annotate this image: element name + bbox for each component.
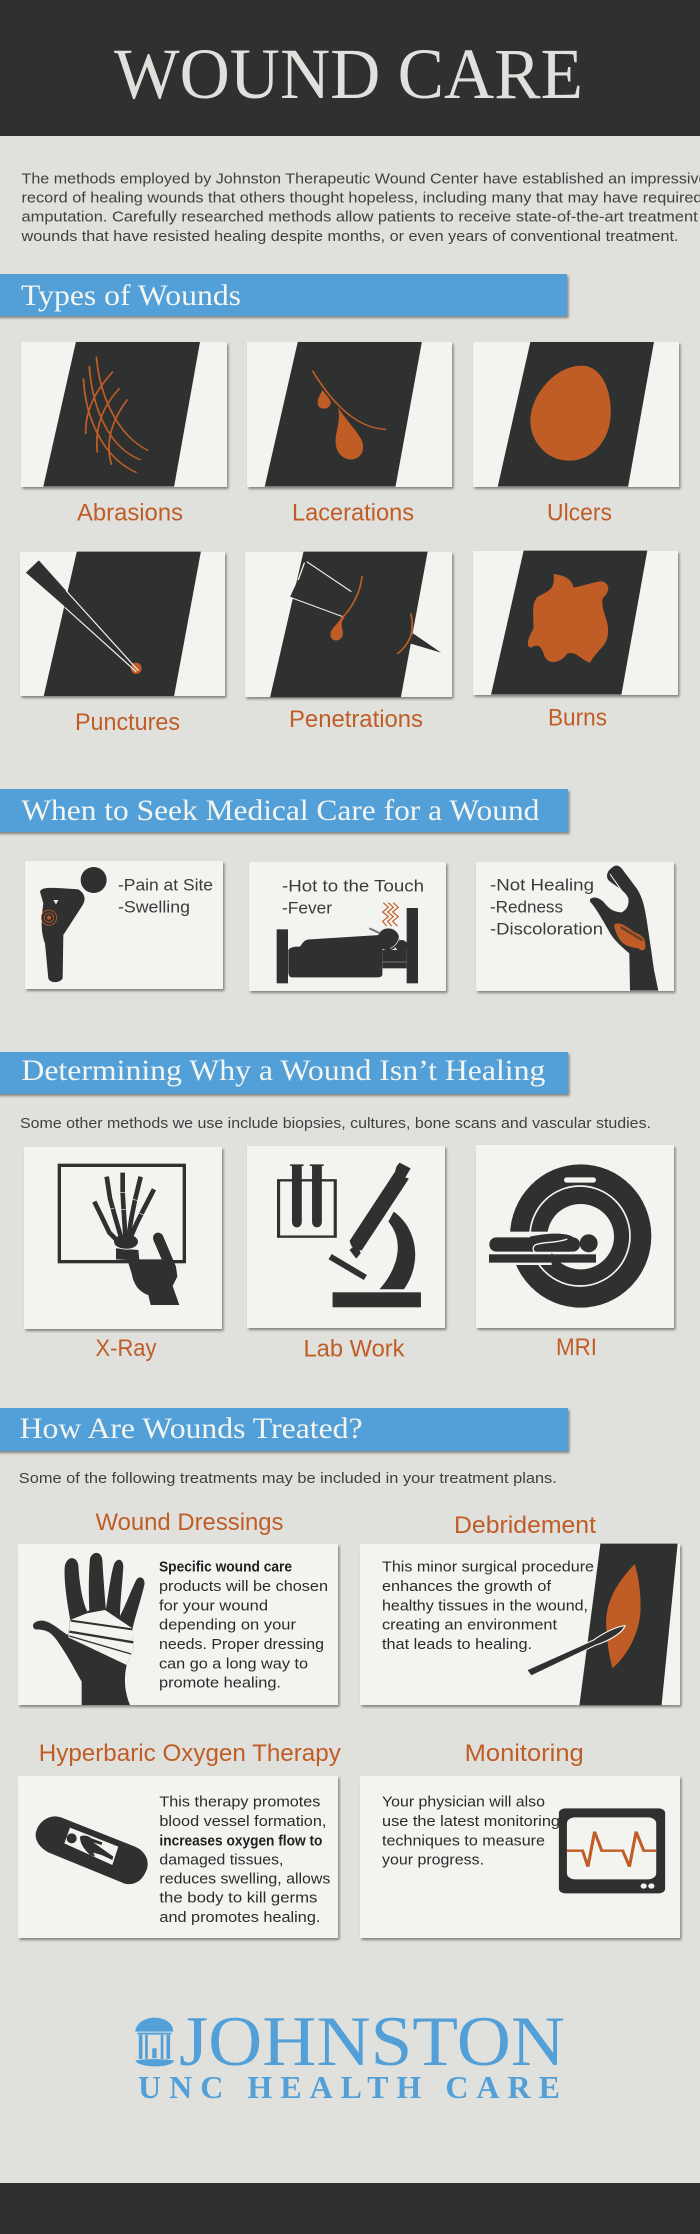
text: monitoring: use the latest monitoring	[382, 1813, 560, 1830]
panel: penetrations	[245, 552, 452, 697]
text: not healing, redness, discoloration	[490, 876, 603, 938]
panel: wound dressings	[18, 1544, 338, 1705]
icon: oxygen chamber	[36, 1816, 148, 1884]
text: hyperbaric: blood vessel formation,	[159, 1813, 326, 1830]
panel: monitoring	[360, 1776, 680, 1938]
wordmark: JOHNSTON	[179, 2003, 565, 2081]
label: ulcers: Ulcers	[547, 500, 612, 527]
text: debridement: creating an environment	[382, 1617, 558, 1634]
text: hyperbaric: This therapy promotes	[159, 1794, 320, 1811]
text: treatment intro: Some of the following treatments may be included in your treatment plans.	[19, 1470, 557, 1487]
section banner: determining why: Determining Why a Wound Isn’t Healing	[21, 1054, 545, 1087]
text: hot, fever	[282, 877, 424, 917]
intro paragraph: wounds that have resisted healing despite months, or even years of conventional treatment.	[20, 228, 679, 245]
text: wound dressings: needs. Proper dressing	[159, 1636, 324, 1653]
label: lab work: Lab Work	[304, 1336, 405, 1363]
icon: mri scanner	[487, 1164, 651, 1308]
icon: lacerations	[265, 342, 422, 487]
footer band	[0, 2183, 700, 2234]
intro paragraph: record of healing wounds that others thought hopeless, including many that may have required	[22, 190, 700, 207]
panel: ulcers	[473, 342, 679, 487]
text: wound dressings: products will be chosen	[159, 1578, 328, 1595]
text: wound dressings: for your wound	[159, 1597, 268, 1614]
icon: ulcer	[498, 342, 654, 487]
icon: test tubes and microscope	[279, 1163, 421, 1307]
icon: burn	[491, 551, 647, 695]
text: pain, swelling: -Swelling	[118, 897, 190, 916]
text: pain, swelling	[118, 876, 213, 916]
header band	[0, 0, 700, 136]
title: WOUND CARE	[114, 34, 583, 114]
icon: bandaged hand	[33, 1553, 145, 1705]
label: wound dressings: Wound Dressings	[96, 1509, 284, 1536]
section banner: when to seek care	[0, 789, 568, 832]
text: monitoring: your progress.	[382, 1851, 484, 1868]
label: hyperbaric oxygen therapy: Hyperbaric Oxygen Therapy	[39, 1740, 341, 1767]
section banner: types of wounds	[0, 274, 567, 316]
icon: old well	[135, 2018, 174, 2066]
label: x-ray: X-Ray	[96, 1335, 156, 1362]
text: not healing, redness, discoloration: -Redness	[490, 898, 563, 917]
text: not healing, redness, discoloration: -Not Healing	[490, 876, 594, 895]
text: hyperbaric: reduces swelling, allows	[159, 1871, 330, 1888]
text: wound dressings	[159, 1559, 328, 1691]
icon: patient in bed	[277, 903, 418, 983]
panel: x-ray	[24, 1147, 222, 1329]
panel: abrasions	[21, 342, 227, 487]
icon: wounded hand	[590, 866, 658, 991]
section banner: types of wounds: Types of Wounds	[21, 279, 241, 312]
text: debridement: This minor surgical procedure	[382, 1559, 594, 1576]
icon: abrasions	[43, 342, 200, 487]
text: hyperbaric	[159, 1794, 330, 1926]
text: debridement	[382, 1559, 594, 1653]
panel: lacerations	[247, 342, 452, 487]
section banner: when to seek care: When to Seek Medical Care for a Wound	[21, 794, 539, 827]
panel: debridement	[360, 1544, 680, 1705]
text: monitoring: Your physician will also	[382, 1794, 545, 1811]
panel: lab work	[247, 1146, 445, 1328]
text: hot, fever: -Hot to the Touch	[282, 877, 424, 896]
text: debridement: that leads to healing.	[382, 1636, 532, 1653]
icon: puncture	[26, 552, 201, 696]
label: penetrations: Penetrations	[289, 706, 423, 733]
text: hyperbaric: increases oxygen flow to	[159, 1832, 322, 1849]
label: lacerations: Lacerations	[292, 500, 414, 527]
panel: burns	[473, 551, 678, 695]
panel: hyperbaric oxygen therapy	[18, 1776, 338, 1938]
icon: x-ray	[59, 1165, 184, 1305]
text: wound dressings: depending on your	[159, 1617, 296, 1634]
section banner: determining why	[0, 1052, 568, 1094]
text: monitoring	[382, 1794, 560, 1868]
text: not healing, redness, discoloration: -Discoloration	[490, 919, 603, 938]
panel: punctures	[20, 552, 225, 696]
intro paragraph: amputation. Carefully researched methods allow patients to receive state-of-the-art treatment for	[22, 209, 700, 226]
text: wound dressings: promote healing.	[159, 1674, 281, 1691]
section banner: how are wounds treated	[0, 1408, 568, 1451]
text: other methods: Some other methods we use include biopsies, cultures, bone scans and vascular studies.	[20, 1115, 651, 1132]
text: wound dressings: can go a long way to	[159, 1655, 308, 1672]
label: monitoring: Monitoring	[465, 1740, 584, 1767]
icon: scalpel on wound	[527, 1544, 678, 1705]
text: monitoring: techniques to measure	[382, 1832, 545, 1849]
panel: hot to the touch	[249, 862, 446, 991]
intro paragraph: The methods employed by Johnston Therapeutic Wound Center have established an impressive	[22, 170, 700, 187]
logo	[135, 2003, 565, 2105]
section banner: how are wounds treated: How Are Wounds Treated?	[20, 1412, 363, 1445]
panel: not healing	[476, 862, 674, 991]
text: pain, swelling: -Pain at Site	[118, 876, 213, 895]
label: burns: Burns	[548, 705, 607, 732]
text: hot, fever: -Fever	[282, 898, 332, 917]
panel: pain at site	[25, 861, 223, 989]
icon: person with pain	[40, 867, 107, 982]
icon: heart monitor	[559, 1808, 665, 1893]
label: abrasions: Abrasions	[77, 500, 183, 527]
text: debridement: healthy tissues in the wound,	[382, 1597, 588, 1614]
panel: mri	[476, 1145, 674, 1328]
text: hyperbaric: the body to kill germs	[159, 1890, 317, 1907]
text: hyperbaric: damaged tissues,	[159, 1851, 283, 1868]
sub wordmark: UNC HEALTH CARE	[138, 2069, 560, 2105]
label: mri: MRI	[556, 1334, 597, 1361]
intro paragraph	[20, 170, 700, 245]
icon: penetration	[270, 552, 441, 697]
text: debridement: enhances the growth of	[382, 1578, 552, 1595]
label: punctures: Punctures	[75, 709, 180, 736]
label: debridement: Debridement	[454, 1512, 596, 1539]
text: wound dressings: Specific wound care	[159, 1559, 292, 1576]
text: hyperbaric: and promotes healing.	[159, 1909, 320, 1926]
